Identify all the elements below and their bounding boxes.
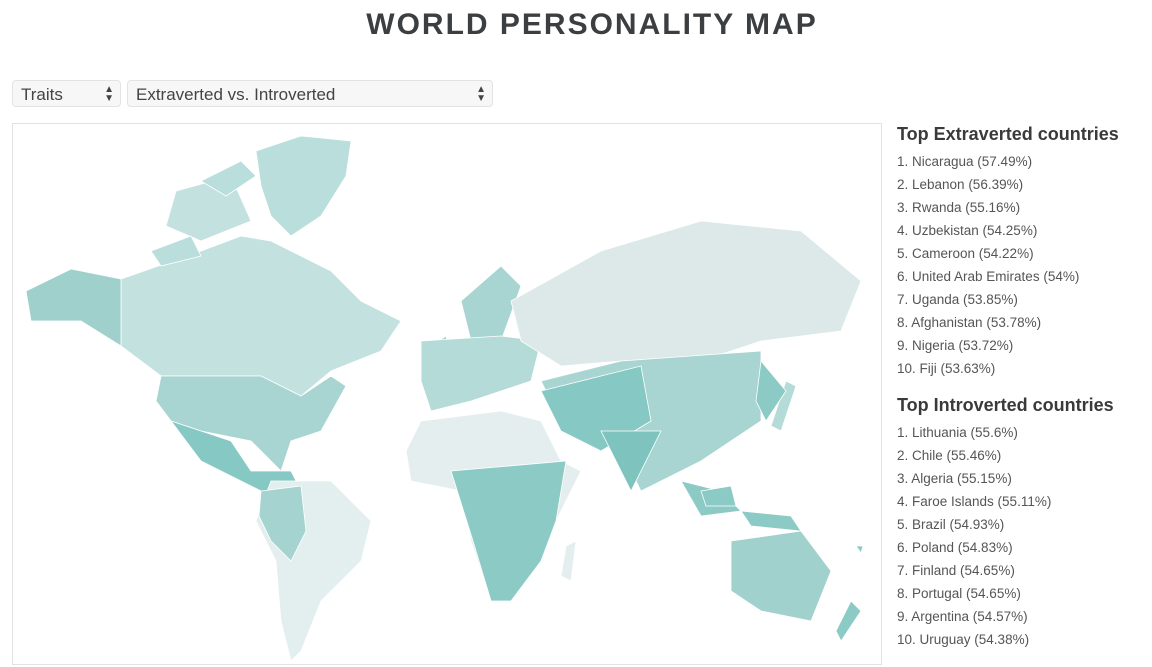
list: top extraverted: 10. Fiji (53.63%) xyxy=(897,361,995,376)
dropdown: dimension xyxy=(127,80,493,107)
list: top extraverted: 8. Afghanistan (53.78%) xyxy=(897,315,1041,330)
south america xyxy=(256,481,371,661)
list: top introverted: 5. Brazil (54.93%) xyxy=(897,517,1004,532)
middle east and asia xyxy=(541,351,761,491)
alaska xyxy=(26,269,121,346)
usa xyxy=(156,376,346,471)
list: top extraverted: 7. Uganda (53.85%) xyxy=(897,292,1018,307)
list: top introverted: 1. Lithuania (55.6%) xyxy=(897,425,1018,440)
map panel xyxy=(12,123,882,665)
list: top introverted xyxy=(897,395,1114,647)
list: top extraverted: 9. Nigeria (53.72%) xyxy=(897,338,1013,353)
list: top introverted: 8. Portugal (54.65%) xyxy=(897,586,1021,601)
list: top introverted: Top Introverted countries xyxy=(897,395,1114,415)
africa xyxy=(406,411,581,601)
russia xyxy=(511,221,861,366)
india xyxy=(601,431,661,491)
list: top introverted: 4. Faroe Islands (55.11%) xyxy=(897,494,1051,509)
list: top extraverted xyxy=(897,124,1119,376)
dropdown: traits xyxy=(12,80,121,107)
list: top extraverted: 6. United Arab Emirates (54%) xyxy=(897,269,1079,284)
canada xyxy=(121,161,401,396)
list: top extraverted: 4. Uzbekistan (54.25%) xyxy=(897,223,1037,238)
greenland xyxy=(256,136,351,236)
list: top introverted: 9. Argentina (54.57%) xyxy=(897,609,1028,624)
japan xyxy=(771,381,796,431)
dropdown: traits: ▲ xyxy=(104,84,114,95)
list: top extraverted: 2. Lebanon (56.39%) xyxy=(897,177,1023,192)
southeast asia islands xyxy=(681,361,801,531)
australia xyxy=(731,531,863,641)
list: top introverted: 7. Finland (54.65%) xyxy=(897,563,1015,578)
list: top extraverted: Top Extraverted countries xyxy=(897,124,1119,144)
list: top introverted: 2. Chile (55.46%) xyxy=(897,448,1001,463)
list: top extraverted: 1. Nicaragua (57.49%) xyxy=(897,154,1032,169)
dropdown: dimension: ▲ xyxy=(476,84,486,95)
uk xyxy=(431,336,451,371)
dropdown: traits: ▼ xyxy=(104,93,114,104)
mexico central america xyxy=(171,421,301,501)
dropdown: traits: Traits xyxy=(21,85,63,104)
dropdown: dimension: Extraverted vs. Introverted xyxy=(136,85,335,104)
list: top introverted: 3. Algeria (55.15%) xyxy=(897,471,1012,486)
list: top extraverted: 5. Cameroon (54.22%) xyxy=(897,246,1034,261)
list: top extraverted: 3. Rwanda (55.16%) xyxy=(897,200,1020,215)
dropdown: dimension: ▼ xyxy=(476,93,486,104)
europe xyxy=(421,336,541,411)
list: top introverted: 10. Uruguay (54.38%) xyxy=(897,632,1029,647)
scandinavia xyxy=(461,266,521,341)
list: top introverted: 6. Poland (54.83%) xyxy=(897,540,1013,555)
title: WORLD PERSONALITY MAP xyxy=(366,8,818,41)
